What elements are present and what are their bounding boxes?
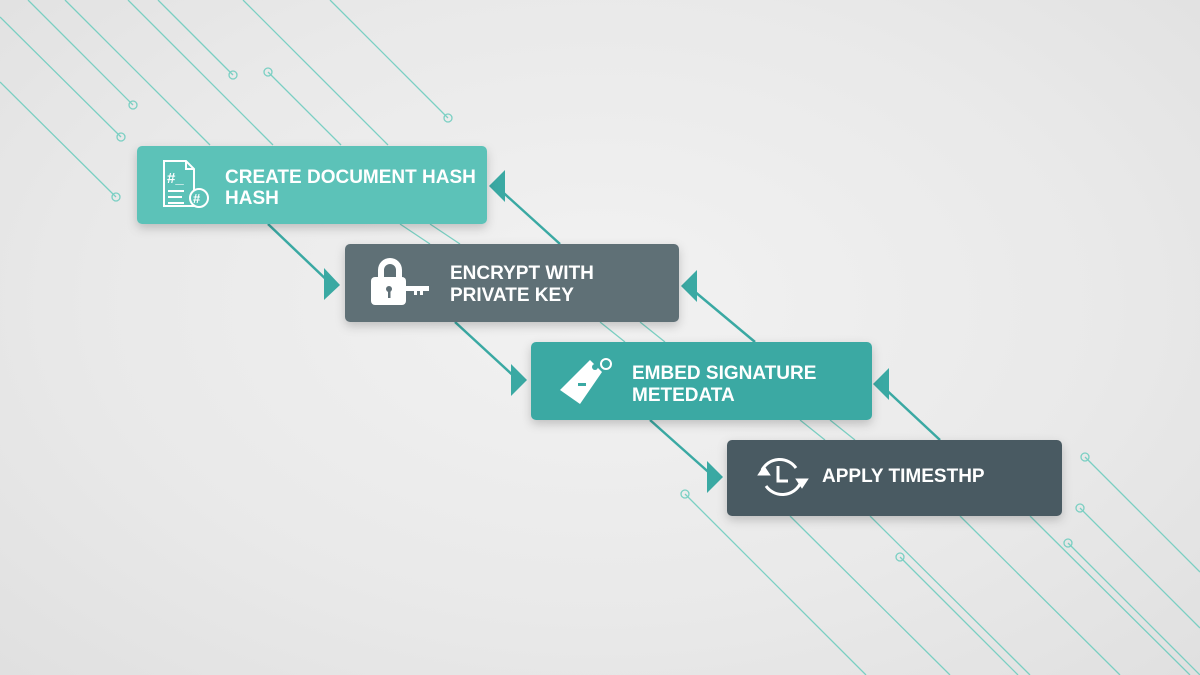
arrow: step 2 to step 3 (455, 322, 527, 396)
icon: document hash: #_ (167, 170, 184, 187)
arrow: return to step 2 (681, 270, 755, 342)
icon: clock refresh (760, 459, 806, 495)
step 1: create document hash: CREATE DOCUMENT HASH (225, 167, 476, 188)
step 3: embed signature metadata: EMBED SIGNATURE (632, 363, 816, 384)
icon: tag (560, 359, 611, 404)
icon: padlock key (371, 258, 429, 305)
arrow: step 3 to step 4 (650, 420, 723, 493)
icon: document hash: # (193, 191, 201, 206)
step 2: encrypt with private key: ENCRYPT WITH (450, 263, 594, 284)
step 2: encrypt with private key: PRIVATE KEY (450, 285, 574, 306)
step 2: encrypt with private key (345, 244, 679, 322)
arrow: step 1 to step 2 (268, 224, 340, 300)
arrow: return to step 3 (873, 368, 940, 440)
step 3: embed signature metadata (531, 342, 872, 420)
icon: document hash (164, 161, 208, 207)
arrow: return to step 1 (489, 170, 560, 244)
step 1: create document hash: HASH (225, 188, 279, 209)
step 4: apply timestamp: APPLY TIMESTHP (822, 466, 985, 487)
step 4: apply timestamp (727, 440, 1062, 516)
step 1: create document hash (137, 146, 487, 224)
step 3: embed signature metadata: METEDATA (632, 385, 735, 406)
